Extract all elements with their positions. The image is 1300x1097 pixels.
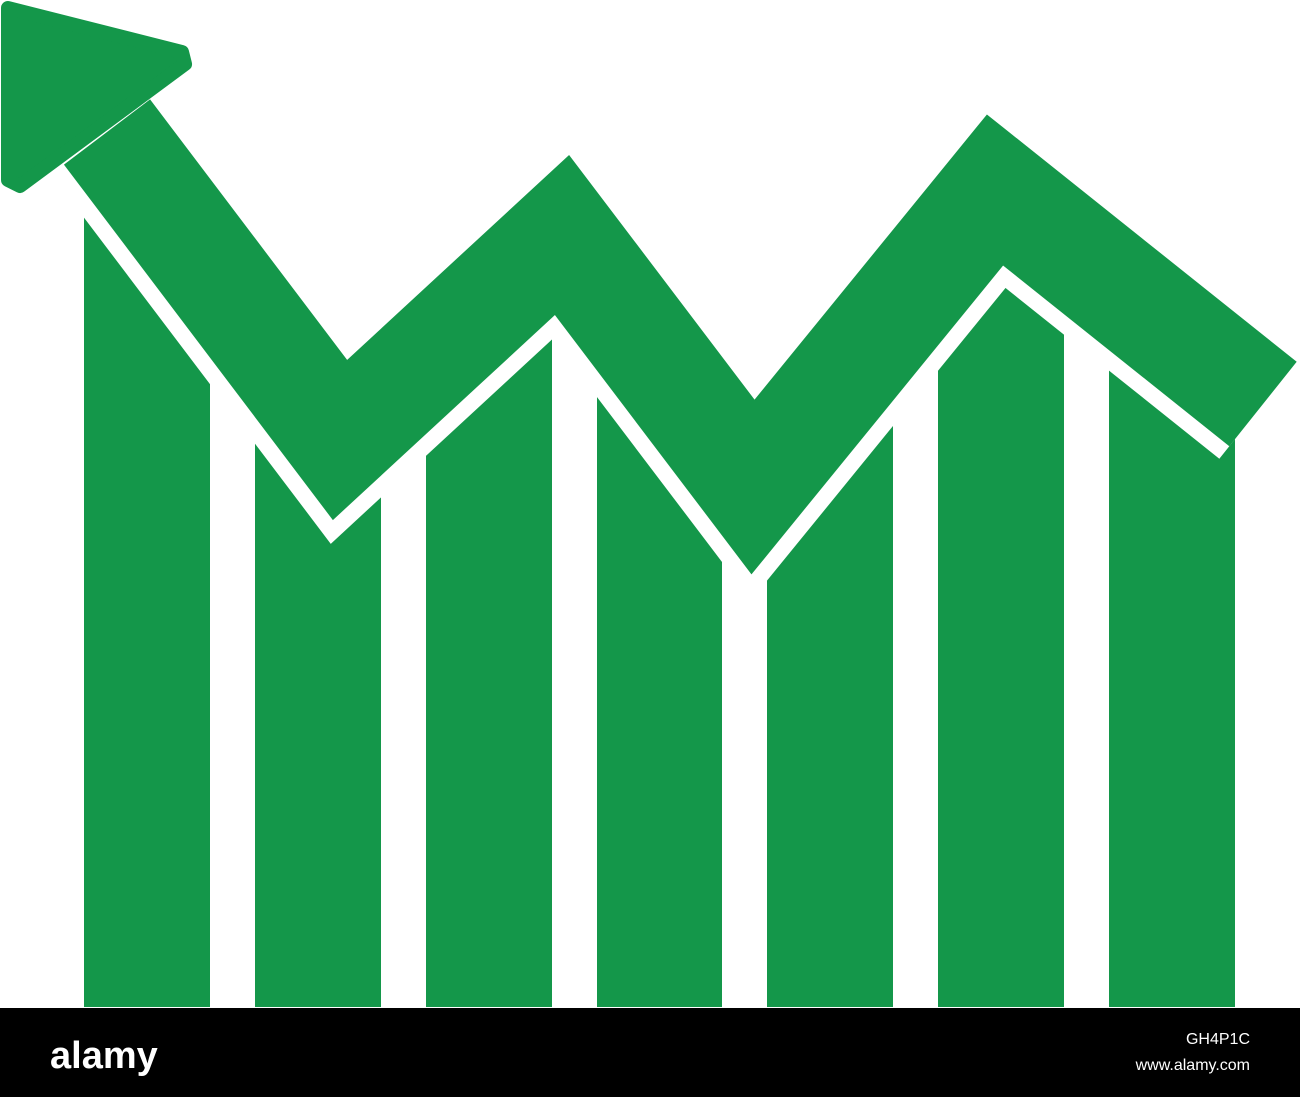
arrow: zigzag trend line [8, 8, 1263, 487]
footer image id: GH4P1C [1186, 1031, 1250, 1048]
footer url: www.alamy.com [1135, 1057, 1250, 1074]
footer bar [0, 1008, 1300, 1097]
bar chart [84, 150, 1235, 1007]
footer logo: alamy [50, 1035, 158, 1077]
